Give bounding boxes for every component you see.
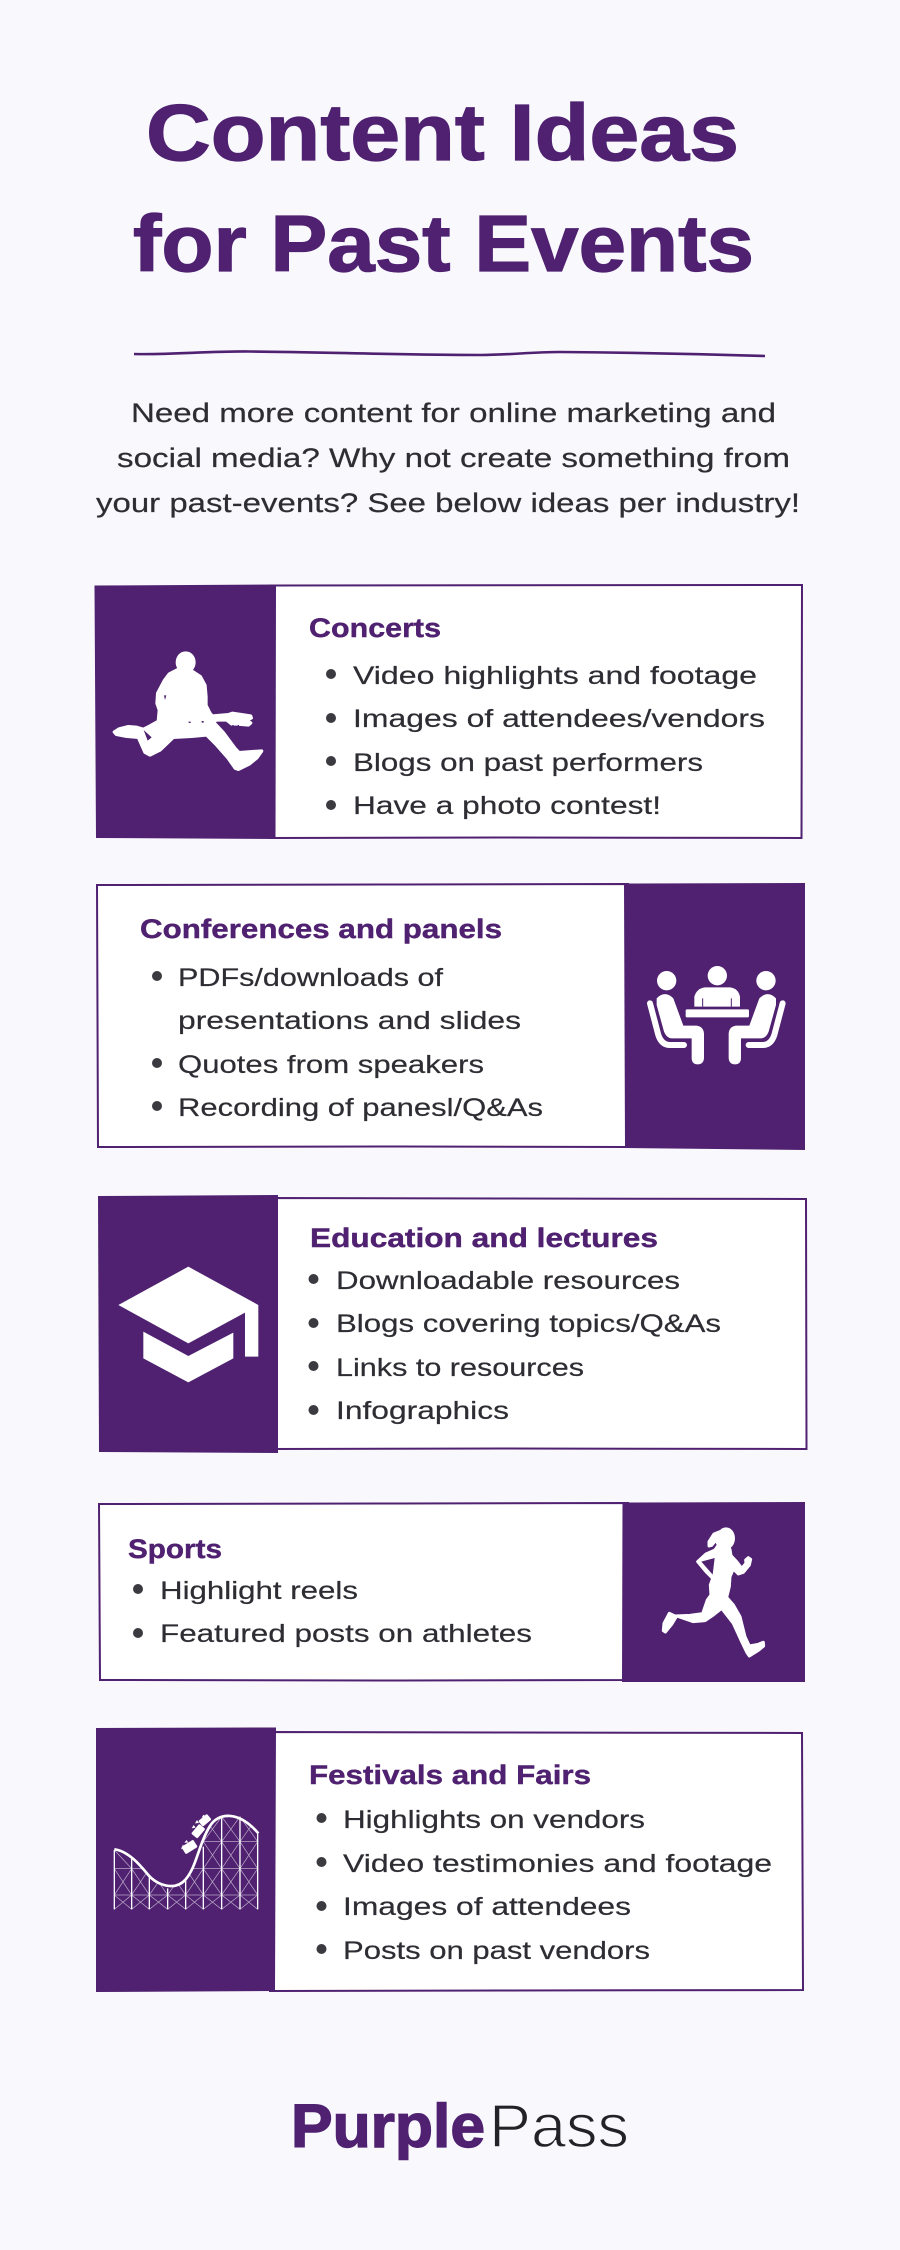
panel: conferences and panels <box>97 883 805 1150</box>
panel: concerts <box>94 584 802 839</box>
list: sports ideas <box>133 1577 532 1648</box>
list: festival ideas <box>316 1806 772 1965</box>
list: conference ideas: PDFs/downloads of <box>178 964 443 992</box>
list: education ideas <box>308 1267 721 1425</box>
intro paragraph <box>96 398 800 518</box>
list: concerts ideas <box>326 662 765 820</box>
icon: runner <box>663 1527 764 1656</box>
list: sports ideas: Featured posts on athletes <box>160 1620 532 1648</box>
list: festival ideas: Posts on past vendors <box>343 1937 650 1965</box>
list: conference ideas: Quotes from speakers <box>178 1051 484 1079</box>
list: sports ideas: Highlight reels <box>160 1577 358 1605</box>
logo: PurplePass: Purple <box>291 2092 485 2160</box>
heading: sports: Sports <box>128 1534 222 1564</box>
intro paragraph: Need more content for online marketing and <box>131 398 776 428</box>
title: for Past Events <box>133 199 754 288</box>
list: conference ideas: Recording of panesl/Q&As <box>178 1094 543 1122</box>
title: Content Ideas <box>146 88 739 177</box>
title <box>133 88 754 288</box>
list: concerts ideas: Images of attendees/vendors <box>353 705 765 733</box>
icon: graduation cap <box>118 1267 258 1382</box>
panel: sports <box>99 1502 805 1682</box>
icon: jumping guitarist <box>114 651 262 769</box>
list: concerts ideas: Blogs on past performers <box>353 749 703 777</box>
hand-drawn title rule <box>134 351 765 356</box>
heading: education and lectures: Education and lectures <box>310 1223 658 1253</box>
intro paragraph: social media? Why not create something from <box>117 443 790 473</box>
logo: PurplePass <box>291 2092 629 2160</box>
list: festival ideas: Video testimonies and footage <box>343 1850 772 1878</box>
list: concerts ideas: Have a photo contest! <box>353 792 661 820</box>
list: festival ideas: Images of attendees <box>343 1893 631 1921</box>
intro paragraph: your past-events? See below ideas per industry! <box>96 488 800 518</box>
heading: concerts: Concerts <box>309 613 441 643</box>
list: education ideas: Links to resources <box>336 1354 584 1382</box>
list: festival ideas: Highlights on vendors <box>343 1806 645 1834</box>
panel: education and lectures <box>98 1195 806 1453</box>
list: conference ideas <box>152 964 543 1122</box>
list: education ideas: Blogs covering topics/Q&As <box>336 1310 721 1338</box>
heading: festivals and fairs: Festivals and Fairs <box>309 1760 591 1790</box>
list: concerts ideas: Video highlights and footage <box>353 662 757 690</box>
icon: people meeting at a table <box>650 966 783 1064</box>
list: education ideas: Downloadable resources <box>336 1267 680 1295</box>
list: conference ideas: presentations and slides <box>178 1007 521 1035</box>
list: education ideas: Infographics <box>336 1397 509 1425</box>
logo: PurplePass: Pass <box>489 2092 629 2160</box>
icon: roller coaster <box>108 1814 262 1909</box>
panel: festivals and fairs <box>96 1728 803 1992</box>
heading: conferences and panels: Conferences and panels <box>140 914 502 944</box>
